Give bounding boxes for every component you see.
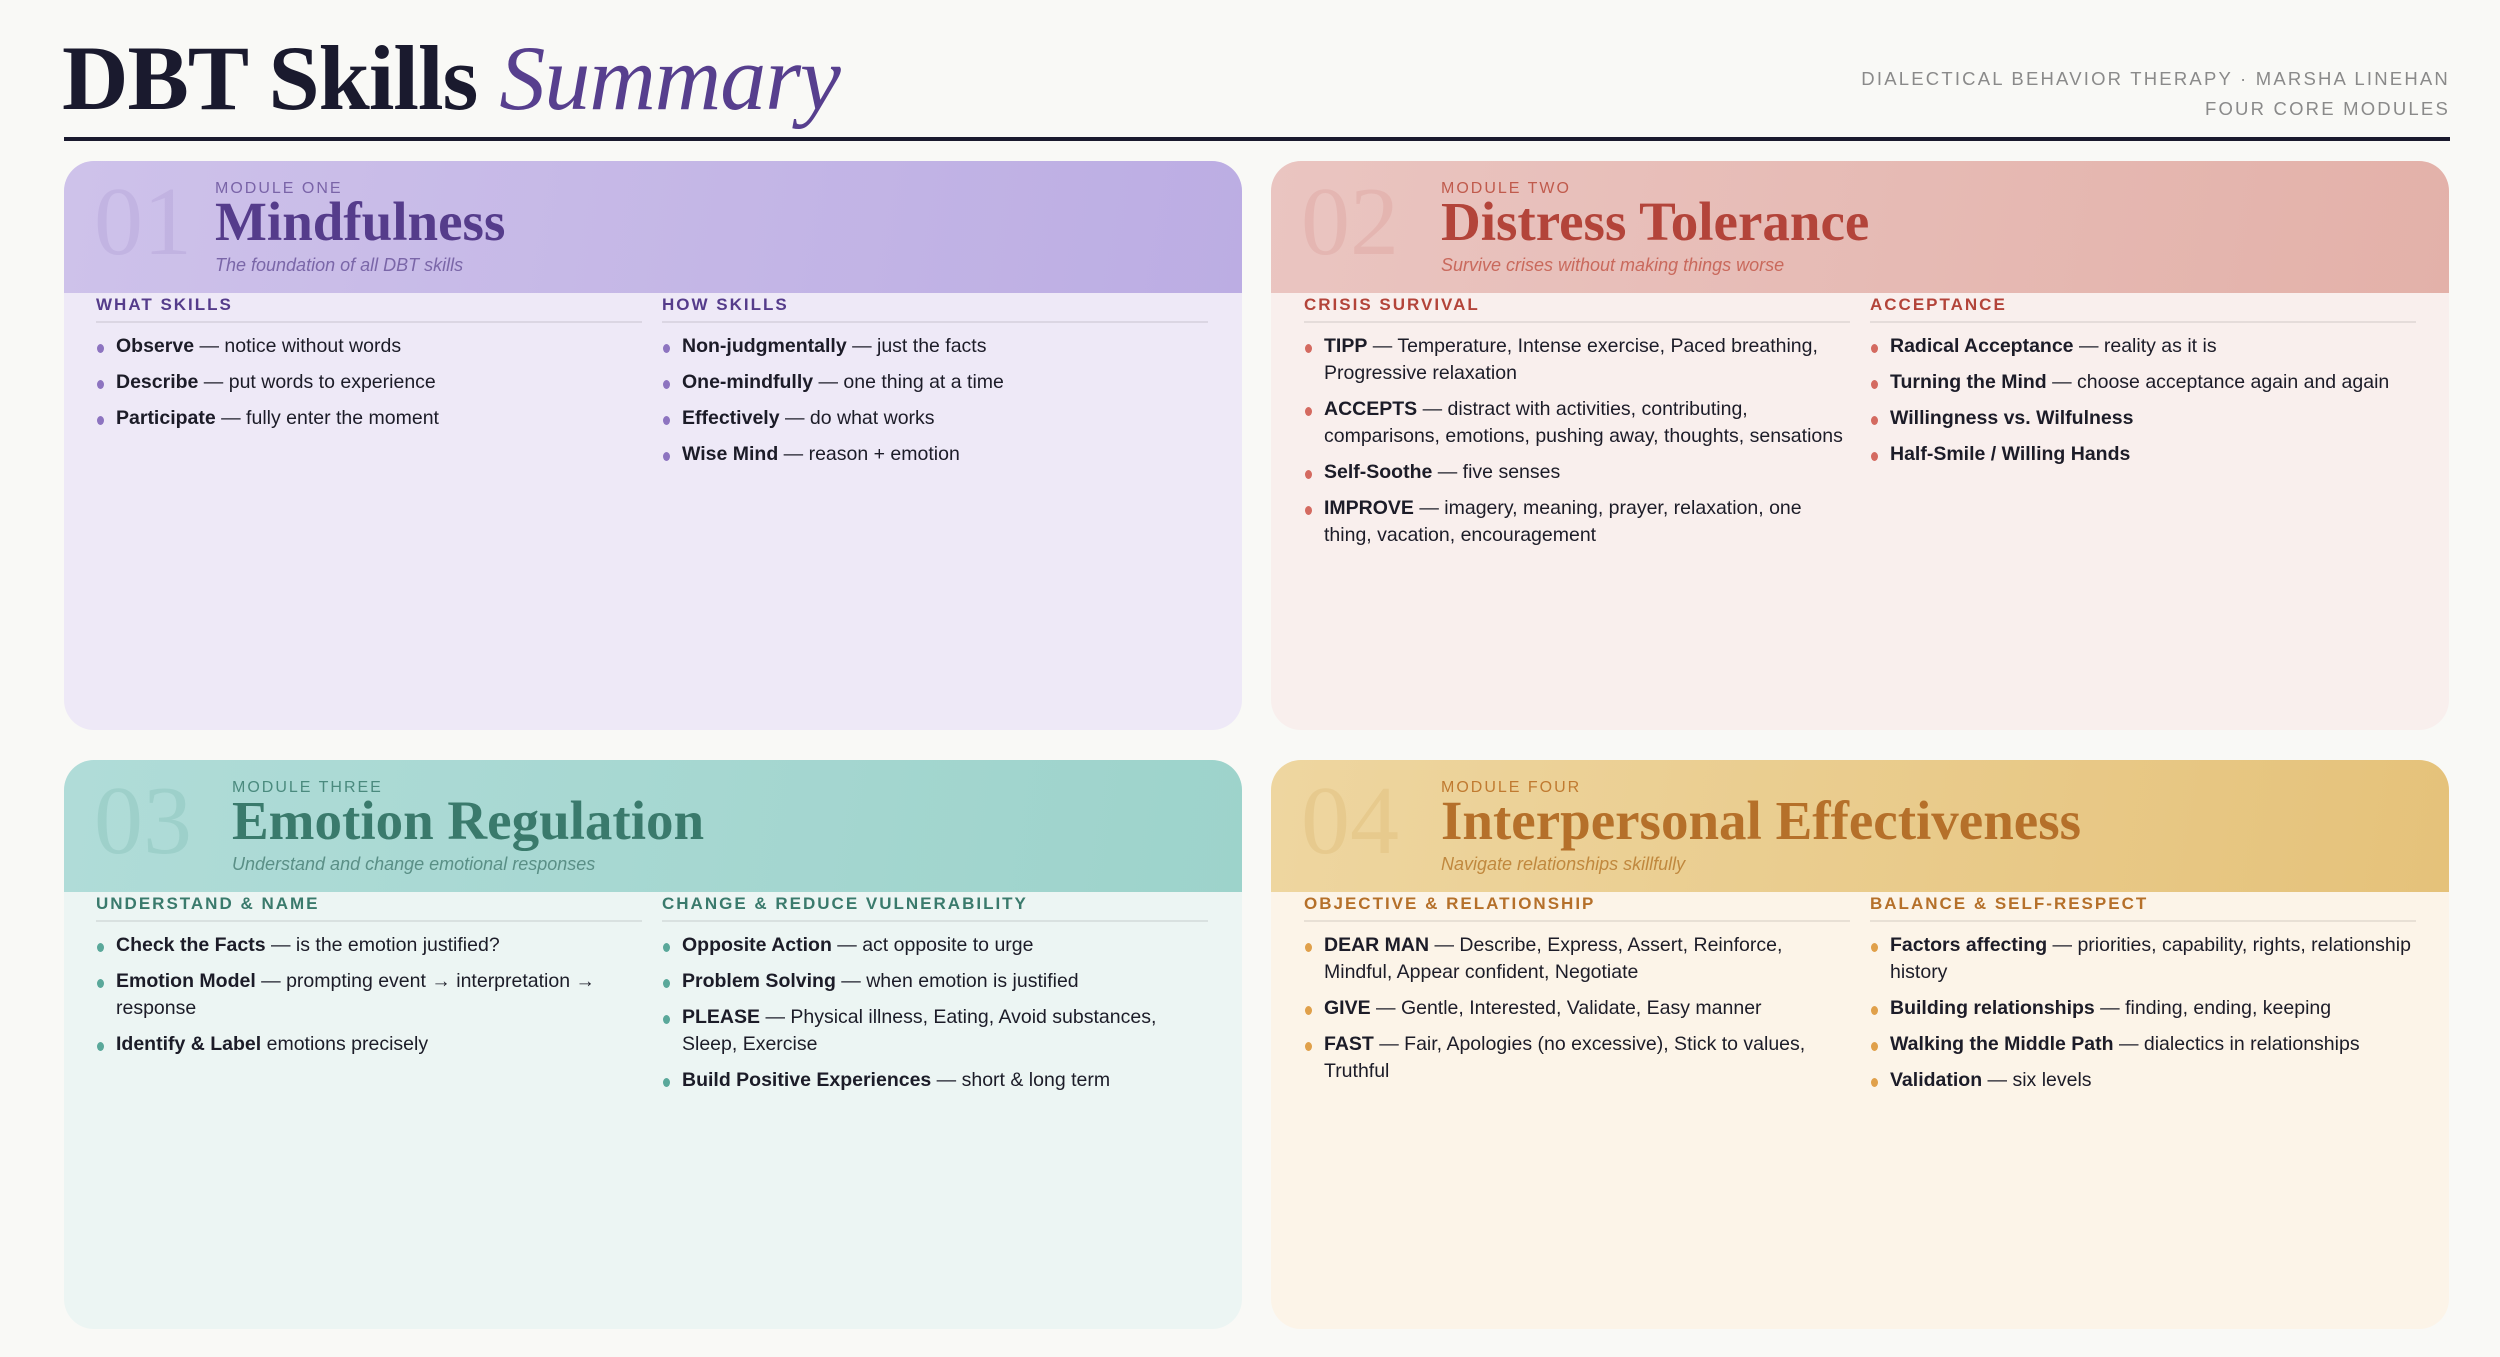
header: mindfulness: Mindfulness	[215, 191, 505, 252]
header: mindfulness: 01	[94, 168, 192, 276]
column: acceptance: Radical Acceptance — reality as it is	[1890, 335, 2217, 357]
column: objective & relationship: FAST — Fair, Apologies (no excessive), Stick to values, Truthful	[1324, 1033, 1805, 1082]
column: what skills: WHAT SKILLS	[96, 295, 233, 314]
column: what skills: Observe — notice without words	[116, 335, 401, 357]
column: balance & self-respect: BALANCE & SELF-RESPECT	[1870, 894, 2148, 913]
panel: mindfulness	[64, 161, 1242, 730]
column: balance & self-respect: Walking the Middle Path — dialectics in relationships	[1890, 1033, 2360, 1055]
header: interpersonal effectiveness: 04	[1301, 767, 1399, 875]
subtitle: FOUR CORE MODULES	[2205, 98, 2450, 119]
header: interpersonal effectiveness	[1271, 760, 2449, 892]
subtitle	[1861, 68, 2450, 119]
subtitle: DIALECTICAL BEHAVIOR THERAPY · MARSHA LINEHAN	[1861, 68, 2450, 89]
column: understand & name: Identify & Label emotions precisely	[116, 1033, 428, 1055]
panel: emotion regulation	[64, 760, 1242, 1329]
column: crisis survival: TIPP — Temperature, Intense exercise, Paced breathing, Progressive relaxation	[1324, 335, 1818, 384]
column: balance & self-respect	[1870, 894, 2416, 1091]
column: change & reduce vulnerability: Opposite Action — act opposite to urge	[682, 934, 1033, 956]
column: crisis survival: ACCEPTS — distract with activities, contributing, comparisons, emotions, pushing away, thoughts, sensations	[1324, 398, 1843, 447]
header: mindfulness: MODULE ONE	[215, 180, 343, 197]
column: change & reduce vulnerability: Build Positive Experiences — short & long term	[682, 1069, 1110, 1091]
column: acceptance: ACCEPTANCE	[1870, 295, 2007, 314]
column: acceptance: Willingness vs. Wilfulness	[1890, 407, 2133, 429]
column: what skills: Describe — put words to experience	[116, 371, 436, 393]
column: change & reduce vulnerability: PLEASE — Physical illness, Eating, Avoid substances, Sleep, Exercise	[682, 1006, 1156, 1055]
column: how skills: Wise Mind — reason + emotion	[682, 443, 960, 465]
panel: interpersonal effectiveness	[1271, 760, 2449, 1329]
panel: distress tolerance	[1271, 161, 2449, 730]
column: what skills: Participate — fully enter the moment	[116, 407, 439, 429]
column: change & reduce vulnerability	[662, 894, 1208, 1091]
header: emotion regulation: MODULE THREE	[232, 779, 383, 796]
column: crisis survival	[1304, 295, 1850, 546]
column: acceptance: Turning the Mind — choose acceptance again and again	[1890, 371, 2389, 393]
header: emotion regulation: Emotion Regulation	[232, 790, 704, 851]
column: objective & relationship	[1304, 894, 1850, 1082]
header: emotion regulation	[64, 760, 1242, 892]
column: understand & name	[96, 894, 642, 1055]
column: acceptance: Half-Smile / Willing Hands	[1890, 443, 2130, 465]
header: distress tolerance: MODULE TWO	[1441, 180, 1571, 197]
header: interpersonal effectiveness: MODULE FOUR	[1441, 779, 1581, 796]
column: how skills: Non-judgmentally — just the facts	[682, 335, 986, 357]
header: mindfulness	[64, 161, 1242, 293]
column: how skills: HOW SKILLS	[662, 295, 789, 314]
column: crisis survival: IMPROVE — imagery, meaning, prayer, relaxation, one thing, vacation, encouragement	[1324, 497, 1802, 546]
column: balance & self-respect: Validation — six levels	[1890, 1069, 2092, 1091]
column: what skills	[96, 295, 642, 429]
column: change & reduce vulnerability: CHANGE & REDUCE VULNERABILITY	[662, 894, 1028, 913]
header: distress tolerance	[1271, 161, 2449, 293]
header: emotion regulation: 03	[94, 767, 192, 875]
header: distress tolerance: Distress Tolerance	[1441, 191, 1869, 252]
column: how skills	[662, 295, 1208, 465]
title: DBT Skills Summary	[62, 27, 840, 129]
header: interpersonal effectiveness: Interpersonal Effectiveness	[1441, 790, 2081, 851]
header: distress tolerance: 02	[1301, 168, 1399, 276]
header: mindfulness: The foundation of all DBT skills	[215, 255, 463, 275]
column: understand & name: UNDERSTAND & NAME	[96, 894, 320, 913]
column: how skills: Effectively — do what works	[682, 407, 935, 429]
column: balance & self-respect: Building relationships — finding, ending, keeping	[1890, 997, 2331, 1019]
column: objective & relationship: OBJECTIVE & RELATIONSHIP	[1304, 894, 1595, 913]
header: distress tolerance: Survive crises without making things worse	[1441, 255, 1784, 275]
header: emotion regulation: Understand and change emotional responses	[232, 854, 595, 874]
column: how skills: One-mindfully — one thing at a time	[682, 371, 1004, 393]
column: change & reduce vulnerability: Problem Solving — when emotion is justified	[682, 970, 1079, 992]
column: objective & relationship: DEAR MAN — Describe, Express, Assert, Reinforce, Mindful, Appear confident, Negotiate	[1324, 934, 1782, 983]
header: interpersonal effectiveness: Navigate relationships skillfully	[1441, 854, 1685, 874]
column: balance & self-respect: Factors affecting — priorities, capability, rights, relationship history	[1890, 934, 2411, 983]
column: acceptance	[1870, 295, 2416, 465]
column: crisis survival: Self-Soothe — five senses	[1324, 461, 1560, 483]
column: crisis survival: CRISIS SURVIVAL	[1304, 295, 1480, 314]
column: objective & relationship: GIVE — Gentle, Interested, Validate, Easy manner	[1324, 997, 1762, 1019]
column: understand & name: Check the Facts — is the emotion justified?	[116, 934, 500, 956]
column: understand & name: Emotion Model — prompting event → interpretation → response	[116, 970, 595, 1019]
